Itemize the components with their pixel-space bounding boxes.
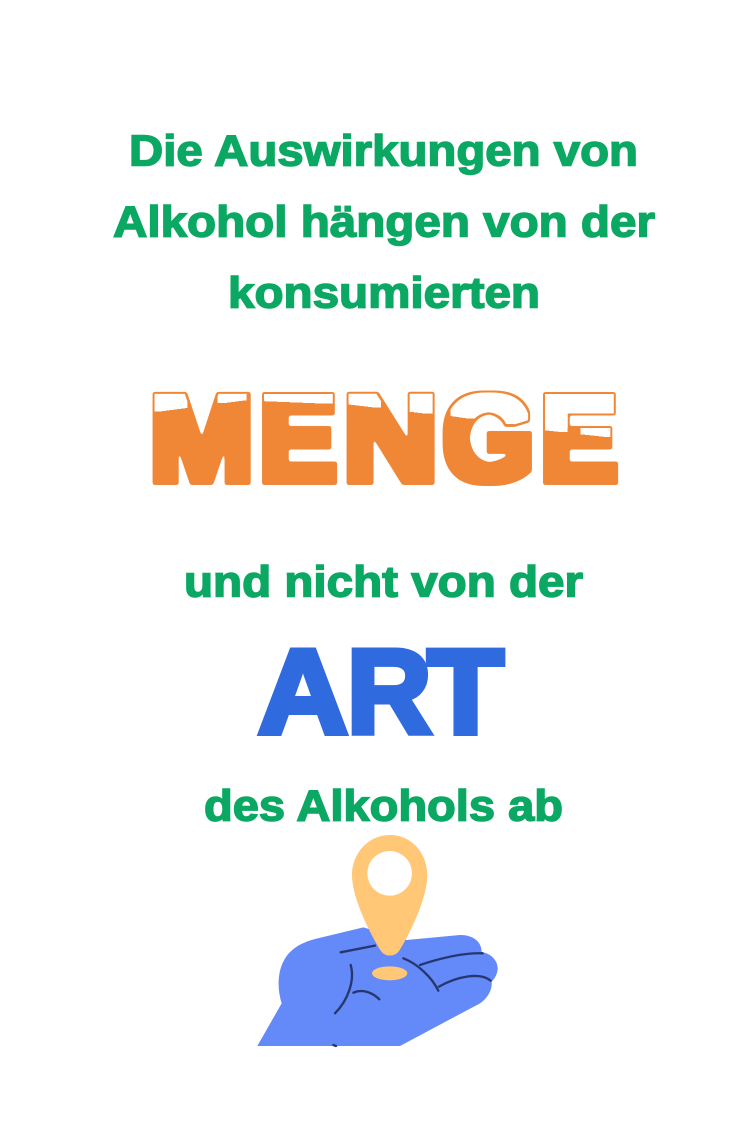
- icon: palm lines: [333, 946, 491, 1046]
- word: ART: A: [258, 625, 348, 759]
- word: ART: R: [347, 625, 432, 759]
- icon: pin shadow: [372, 966, 407, 980]
- heading: intro text: konsumierten: [228, 268, 540, 318]
- icon: hand: [257, 927, 498, 1046]
- heading: intro text: [113, 126, 655, 318]
- heading: intro text: Die Auswirkungen von: [129, 126, 638, 176]
- word: MENGE with liquid fill: E: [540, 370, 618, 506]
- word: ART: [258, 625, 504, 759]
- word: ART: T: [428, 625, 504, 759]
- text: des Alkohols ab: des Alkohols ab: [204, 782, 563, 830]
- icon: location pin: [352, 835, 427, 956]
- heading: intro text: Alkohol hängen von der: [113, 198, 655, 246]
- illustration: hand holding location pin: [257, 835, 498, 1046]
- word: MENGE with liquid fill: E: [259, 370, 337, 506]
- word: MENGE with liquid fill: M: [149, 370, 254, 506]
- word: MENGE with liquid fill: N: [343, 370, 439, 506]
- word: MENGE with liquid fill: [149, 370, 618, 506]
- word: MENGE with liquid fill: G: [443, 370, 534, 506]
- text: und nicht von der: und nicht von der: [184, 558, 583, 606]
